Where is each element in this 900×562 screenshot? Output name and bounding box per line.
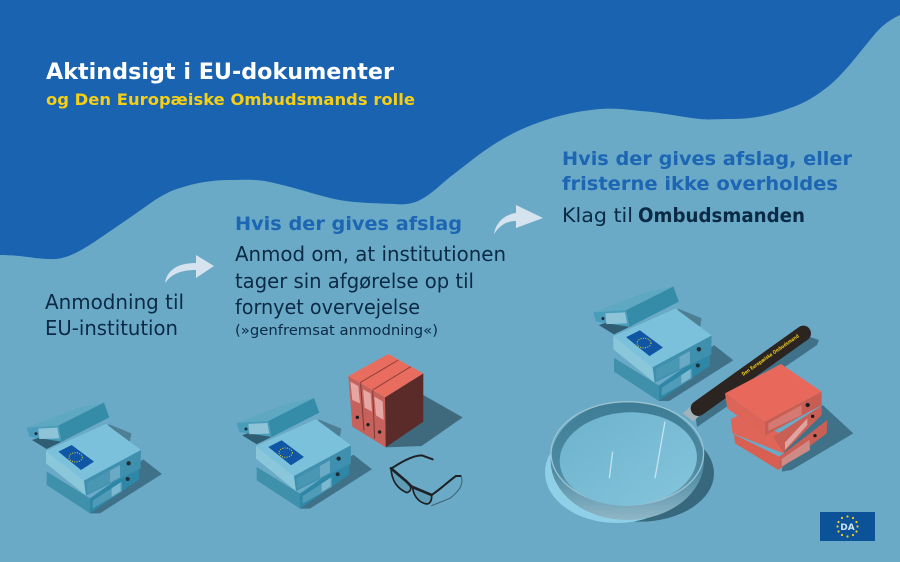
EU flag with language code [820,512,875,541]
step 2 heading: Hvis der gives afslag [235,213,462,235]
subtitle: og Den Europæiske Ombudsmands rolle [46,90,415,109]
magnifying glass handle [683,333,803,422]
magnifying glass handle: Den Europæiske Ombudsmand [741,333,801,378]
magnifying glass lens [545,401,714,523]
glasses [391,455,462,506]
step 1 text [45,290,184,340]
step 3 heading: fristerne ikke overholdes [562,173,838,195]
language code: DA [840,523,855,533]
step 2 text: tager sin afgørelse op til [235,269,474,293]
step 2 text: fornyet overvejelse [235,295,420,319]
handle shadow [695,337,819,427]
binders: step 1 [27,403,162,513]
step 3 text: Ombudsmanden [638,204,805,227]
arrow: step 2 to step 3 [494,205,543,234]
step 3 heading: Hvis der gives afslag, eller [562,148,853,170]
binders: step 2 [237,398,372,509]
step 3 text [562,204,805,227]
step 2 text: Anmod om, at institutionen [235,242,506,266]
arrow: step 1 to step 2 [165,255,214,283]
title: Aktindsigt i EU-dokumenter [46,59,395,85]
red upright binders [348,354,463,447]
step 1 text: EU-institution [45,316,178,340]
stars [836,515,859,538]
red binder stack [725,364,853,472]
dark blue wave header [0,0,900,259]
step 2 text [235,242,506,339]
step 2 text: (»genfremsat anmodning«) [235,323,438,339]
step 3 heading [562,148,853,195]
step 1 text: Anmodning til [45,290,184,314]
binders: step 3 [593,286,733,401]
step 3 text: Klag til [562,204,633,227]
